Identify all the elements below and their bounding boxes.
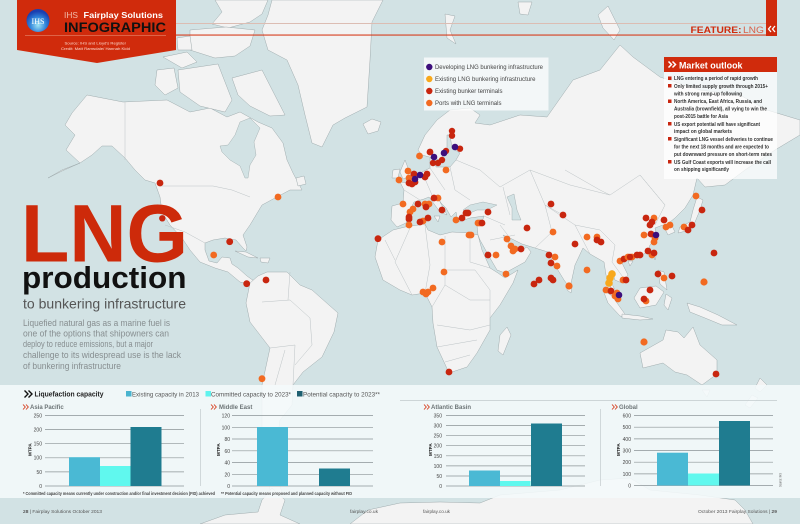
banner credits: Source: IHS and Lloyd's Register bbox=[64, 40, 127, 46]
footer: left page: fairplay.co.uk bbox=[350, 509, 379, 515]
bar chart: Atlantic Basin: 250 bbox=[434, 434, 442, 440]
bar chart: Middle East: MTPA bbox=[216, 443, 221, 456]
legend: port types bbox=[424, 58, 548, 110]
intro paragraph: challenge to its widespread use is the lack bbox=[23, 350, 181, 361]
bar chart: Asia Pacific: Asia Pacific bbox=[30, 405, 64, 411]
market outlook text: Significant LNG vessel deliveries to continue bbox=[674, 137, 773, 143]
subtitle: to bunkering infrastructure bbox=[23, 296, 186, 312]
chart legend: Potential capacity to 2023** bbox=[303, 392, 381, 398]
bar chart: Global: 0 bbox=[628, 484, 631, 490]
bar chart: Middle East: 20 bbox=[224, 472, 230, 478]
banner title: INFOGRAPHIC bbox=[64, 20, 166, 35]
bar chart: Asia Pacific: 50 bbox=[36, 470, 42, 476]
banner: IHS Fairplay Solutions Infographic bbox=[17, 0, 176, 63]
intro paragraph: one of the options that shipowners can bbox=[23, 328, 169, 340]
chart legend bbox=[126, 391, 381, 398]
intro paragraph: of bunkering infrastructure bbox=[23, 361, 121, 372]
footnotes: * Committed capacity means currently under construction and/or final investment decision (FID) achieved bbox=[23, 491, 215, 496]
bar chart: Global bbox=[612, 404, 773, 490]
banner publisher name: IHS bbox=[64, 10, 78, 20]
bar chart: Atlantic Basin: 50 bbox=[436, 474, 442, 480]
footer: right page: fairplay.co.uk bbox=[423, 509, 451, 515]
chart legend: Existing capacity in 2013 bbox=[132, 392, 200, 398]
banner credits: Credit: Matt Ramsdale/ Hannah Kidd bbox=[61, 46, 130, 51]
market outlook text: US export potential will have significant bbox=[674, 122, 760, 128]
market outlook bullets bbox=[668, 76, 672, 164]
feature tab: FEATURE: bbox=[690, 25, 742, 36]
market outlook text: put downward pressure on short-term rates bbox=[674, 152, 772, 158]
bar chart: Asia Pacific bbox=[23, 404, 184, 490]
bar chart: Asia Pacific: 250 bbox=[34, 414, 42, 420]
source note: Source: IHS bbox=[778, 473, 782, 487]
bar chart: Atlantic Basin: 200 bbox=[434, 444, 442, 450]
bar chart: Middle East: 60 bbox=[224, 449, 230, 455]
map markers: port locations bbox=[157, 128, 719, 382]
bar chart: Middle East: Middle East bbox=[219, 405, 252, 411]
market outlook text: impact on global markets bbox=[674, 129, 732, 135]
market outlook text: for the next 18 months and are expected to bbox=[674, 145, 770, 151]
bar chart: Middle East: 80 bbox=[224, 437, 230, 443]
market outlook text bbox=[673, 76, 773, 173]
legend item: ports with LNG terminals: Ports with LNG terminals bbox=[435, 101, 502, 107]
market outlook text: on shipping significantly bbox=[674, 167, 729, 173]
bar chart: Atlantic Basin: 100 bbox=[434, 464, 442, 470]
title: LNG: LNG bbox=[21, 188, 188, 280]
landmass: islands of Europe and the Arctic bbox=[392, 2, 620, 222]
footer: left page: 28 | Fairplay Solutions October 2013 bbox=[23, 509, 102, 515]
bar chart: Middle East: 40 bbox=[224, 460, 230, 466]
title: production: production bbox=[22, 260, 186, 295]
market outlook text: Australia (brownfield), all vying to win the bbox=[674, 107, 767, 113]
market outlook text: US Gulf Coast exports will increase the call bbox=[674, 160, 771, 166]
footer: right page: October 2013 Fairplay Solutions | 29 bbox=[698, 509, 777, 515]
landmass: Asia Pacific islands and Australia bbox=[498, 197, 767, 408]
intro paragraph: Liquefied natural gas as a marine fuel is bbox=[23, 318, 170, 329]
chart legend: Committed capacity to 2023* bbox=[211, 392, 292, 398]
bar chart: Global: 300 bbox=[623, 448, 631, 454]
country borders bbox=[125, 102, 665, 385]
footer: right page bbox=[423, 509, 777, 515]
bar chart: Global: 500 bbox=[623, 425, 631, 431]
banner publisher name: Fairplay Solutions bbox=[84, 10, 163, 20]
landmass: North and Central America bbox=[48, 0, 383, 284]
market outlook heading: Market outlook bbox=[679, 60, 743, 70]
landmass: Eurasia bbox=[391, 45, 800, 298]
bar chart: Asia Pacific: MTPA bbox=[28, 443, 32, 456]
panel: market outlook bbox=[664, 57, 777, 179]
icon: IHS logo globe: IHS bbox=[32, 17, 44, 26]
bar chart: Atlantic Basin bbox=[424, 404, 585, 490]
footnotes: ** Potential capacity means proposed and planned capacity without FID bbox=[221, 491, 352, 496]
intro paragraph: deploy to reduce emissions, but a major bbox=[23, 339, 153, 350]
landmass: Antarctica bbox=[200, 478, 753, 524]
legend item: existing bunker terminals: Existing bunker terminals bbox=[435, 89, 502, 95]
market outlook text: LNG entering a period of rapid growth bbox=[674, 76, 758, 82]
icon: IHS logo globe bbox=[26, 9, 50, 32]
bar chart: Atlantic Basin: Atlantic Basin bbox=[431, 405, 471, 411]
map marker over title bbox=[159, 215, 166, 222]
bar chart: Asia Pacific: 100 bbox=[34, 456, 42, 462]
market outlook text: post-2015 battle for Asia bbox=[674, 114, 729, 120]
bar chart: Atlantic Basin: 150 bbox=[434, 454, 442, 460]
feature tab: LNG bbox=[743, 25, 764, 36]
market outlook text: Only limited supply growth through 2015+ bbox=[674, 84, 768, 90]
footnotes bbox=[23, 491, 352, 496]
panel: liquefaction capacity bbox=[0, 385, 800, 498]
bar chart: Global: Global bbox=[619, 405, 638, 411]
landmass: South America bbox=[246, 272, 338, 495]
bar chart: Global: 400 bbox=[623, 437, 631, 443]
bar chart: Middle East bbox=[211, 404, 373, 490]
landmass: Africa bbox=[375, 224, 518, 373]
legend item: existing LNG bunkering: Existing LNG bunkering infrastructure bbox=[435, 77, 536, 83]
banner credits bbox=[61, 40, 130, 51]
market outlook text: North America, East Africa, Russia, and bbox=[674, 99, 762, 105]
bar chart: Global: 200 bbox=[623, 460, 631, 466]
bar chart: Middle East: 120 bbox=[222, 414, 230, 420]
bar chart: Global: 600 bbox=[623, 414, 631, 420]
bar chart: Global: MTPA bbox=[616, 443, 621, 456]
bar chart: Asia Pacific: 150 bbox=[34, 442, 42, 448]
top rule lines bbox=[176, 23, 777, 36]
bar chart: Global: 100 bbox=[623, 472, 631, 478]
bar chart: Middle East: 100 bbox=[222, 425, 230, 431]
bar chart: Atlantic Basin: 0 bbox=[439, 484, 442, 490]
bar chart: Asia Pacific: 200 bbox=[34, 428, 42, 434]
market outlook text: with strong ramp-up following bbox=[673, 91, 742, 97]
bar chart: Atlantic Basin: 350 bbox=[434, 414, 442, 420]
chart section heading: Liquefaction capacity bbox=[34, 390, 104, 398]
legend item: developing LNG bunkering: Developing LNG bunkering infrastructure bbox=[435, 65, 544, 71]
bar chart: Asia Pacific: 0 bbox=[39, 484, 42, 490]
intro paragraph bbox=[23, 318, 181, 372]
bar chart: Atlantic Basin: MTPA bbox=[428, 443, 433, 456]
bar chart: Atlantic Basin: 300 bbox=[434, 424, 442, 430]
feature tab bbox=[690, 0, 777, 36]
bar chart: Middle East: 0 bbox=[227, 484, 230, 490]
footer: left page bbox=[23, 509, 379, 515]
